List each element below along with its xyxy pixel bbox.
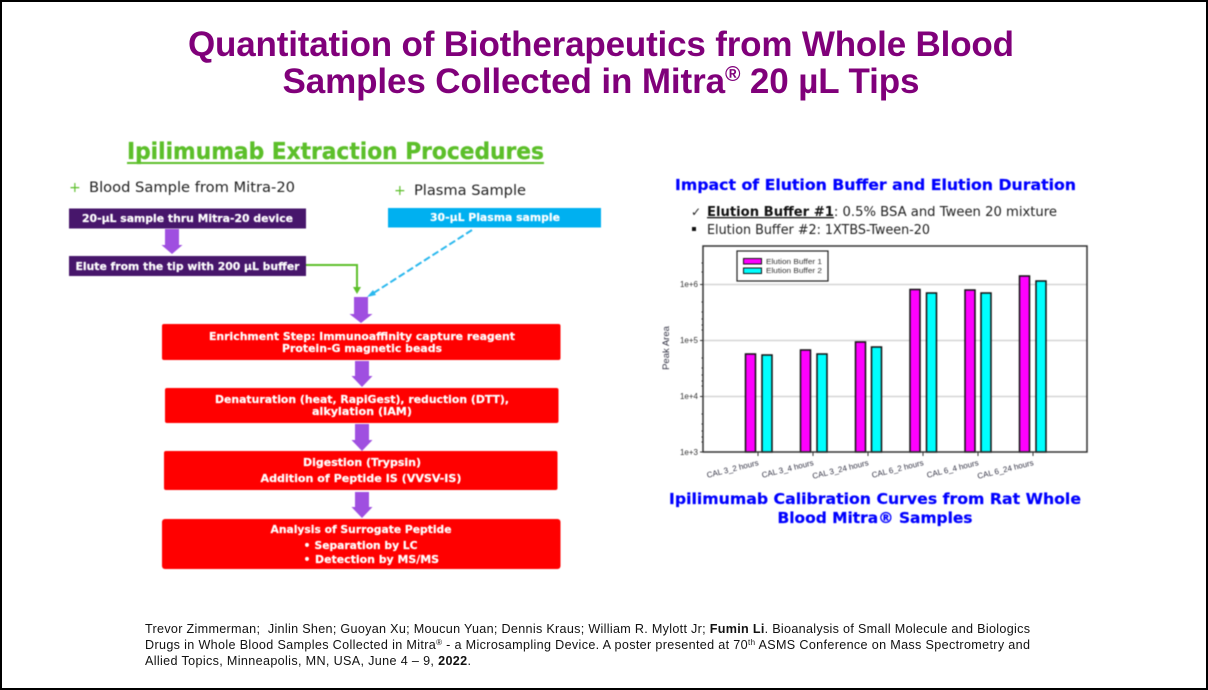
- chart legend: Elution Buffer 1: [766, 257, 822, 266]
- y axis labels: 1e+4: [680, 392, 699, 401]
- box: 20 µL sample: [69, 208, 306, 228]
- citation: Allied Topics, Minneapolis, MN, USA, June 4 – 9, 2022.: [145, 654, 471, 668]
- title: ®: [725, 63, 741, 86]
- title: [188, 25, 1014, 101]
- citation: ®: [436, 638, 442, 647]
- x axis labels: CAL 6_24 hours: [976, 458, 1034, 481]
- bullet: elution buffer 1: ✓: [691, 205, 701, 219]
- heading: extraction procedures: Ipilimumab Extraction Procedures: [127, 139, 544, 165]
- box: plasma sample: 30-µL Plasma sample: [430, 212, 560, 224]
- label: blood sample: +: [69, 180, 81, 196]
- title: 20 µL Tips: [740, 62, 920, 101]
- bar chart: peak area: [661, 246, 1087, 481]
- chart legend: Elution Buffer 2: [766, 266, 822, 275]
- y axis labels: [680, 280, 699, 457]
- x axis labels: CAL 6_2 hours: [871, 458, 924, 480]
- arrow: digestion to analysis: [352, 492, 372, 518]
- panel: extraction procedures: [69, 139, 601, 569]
- box: analysis: Analysis of Surrogate Peptide: [270, 524, 452, 536]
- box: digestion: Addition of Peptide IS (VVSV-IS): [260, 473, 462, 485]
- box: analysis: Detection by MS/MS: [315, 554, 439, 566]
- box: plasma sample: [388, 208, 601, 228]
- caption: calibration curves: Blood Mitra® Samples: [778, 509, 973, 527]
- arrow: sample to elute: [162, 229, 182, 254]
- panel: elution buffer results: [661, 176, 1087, 527]
- x axis labels: CAL 3_4 hours: [761, 458, 814, 480]
- title: Quantitation of Biotherapeutics from Whole Blood: [188, 25, 1014, 64]
- heading: impact of elution buffer: Impact of Elution Buffer and Elution Duration: [675, 176, 1076, 194]
- arrow: plasma to enrichment: [367, 230, 472, 297]
- caption: calibration curves: [669, 490, 1081, 527]
- arrow: denaturation to digestion: [352, 424, 372, 451]
- citation: [145, 622, 1030, 668]
- box: enrichment step: Enrichment Step: Immunoaffinity capture reagent: [209, 331, 515, 343]
- y axis title: Peak Area: [661, 325, 672, 370]
- box: denaturation: Denaturation (heat, RapiGest), reduction (DTT),: [215, 394, 509, 406]
- box: elute: Elute from the tip with 200 µL buffer: [76, 261, 300, 273]
- box: analysis: •: [304, 554, 310, 566]
- citation: Trevor Zimmerman; Jinlin Shen; Guoyan Xu; Moucun Yuan; Dennis Kraus; William R. Mylott Jr; Fumin Li. Bioanalysis of Small Molecule and Biologics: [145, 622, 1030, 636]
- box: analysis: •: [304, 540, 310, 552]
- box: digestion: [164, 451, 558, 490]
- citation: ASMS Conference on Mass Spectrometry and: [755, 638, 1030, 652]
- citation: th: [748, 638, 755, 647]
- box: enrichment step: Protein-G magnetic beads: [282, 343, 442, 355]
- title: Samples Collected in Mitra: [282, 62, 725, 101]
- box: enrichment step: [162, 324, 560, 360]
- x axis labels: CAL 3_2 hours: [706, 458, 759, 480]
- box: 20 µL sample: 20-µL sample thru Mitra-20 device: [82, 213, 293, 225]
- box: analysis: [162, 519, 560, 569]
- box: denaturation: [165, 388, 558, 423]
- arrow: into enrichment: [350, 297, 372, 323]
- caption: calibration curves: Ipilimumab Calibration Curves from Rat Whole: [669, 490, 1081, 508]
- bullet: elution buffer 1: Elution Buffer #1: 0.5% BSA and Tween 20 mixture: [707, 205, 1057, 220]
- y axis labels: 1e+5: [680, 336, 699, 345]
- arrow: enrichment to denaturation: [352, 361, 372, 387]
- label: plasma sample: +: [394, 183, 406, 199]
- label: plasma sample: Plasma Sample: [414, 183, 526, 199]
- bullet: elution buffer 2: Elution Buffer #2: 1XTBS-Tween-20: [707, 223, 930, 238]
- magenta bars: elution buffer 1: [746, 276, 1030, 452]
- box: denaturation: alkylation (IAM): [312, 406, 412, 418]
- box: elute: [69, 256, 306, 276]
- gridlines: [703, 284, 1087, 396]
- box: digestion: Digestion (Trypsin): [303, 457, 421, 469]
- citation: Drugs in Whole Blood Samples Collected in Mitra: [145, 638, 436, 652]
- plot frame: [703, 246, 1087, 452]
- chart legend: [737, 251, 828, 281]
- axis ticks: [700, 263, 1033, 456]
- cyan bars: elution buffer 2: [762, 281, 1046, 452]
- citation: - a Microsampling Device. A poster presented at 70: [442, 638, 748, 652]
- x axis labels: CAL 3_24 hours: [811, 458, 869, 481]
- x axis labels: CAL 6_4 hours: [926, 458, 979, 480]
- label: blood sample: Blood Sample from Mitra-20: [89, 180, 295, 196]
- arrow: elute to enrichment: [306, 265, 361, 294]
- y axis labels: 1e+6: [680, 280, 699, 289]
- box: analysis: Separation by LC: [314, 540, 418, 552]
- x axis labels: [706, 458, 1034, 481]
- y axis labels: 1e+3: [680, 448, 699, 457]
